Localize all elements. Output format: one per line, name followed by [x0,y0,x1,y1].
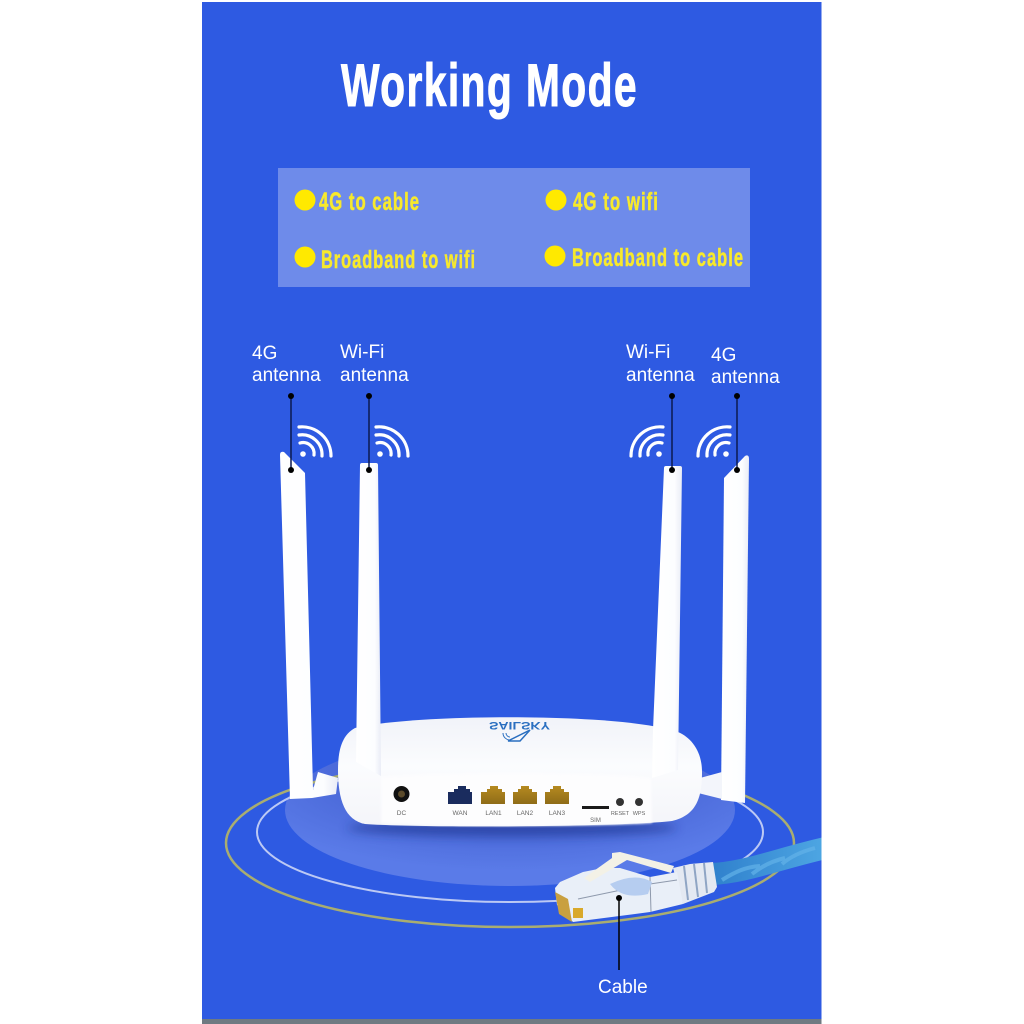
label: 4G antenna left: antenna [252,365,321,386]
label: Cable: Cable [598,977,648,998]
mode: 4G to cable [294,188,420,216]
RESET button [611,798,630,817]
infographic canvas [202,2,822,1024]
leader line: right Wi-Fi [669,393,675,473]
label: Wi-Fi antenna left: antenna [340,365,409,386]
SIM slot: SIM [590,818,601,824]
leader line: cable [616,895,622,970]
plug highlight [610,877,652,896]
WPS button: WPS [633,811,646,817]
mode: Broadband to wifi [294,246,476,274]
LAN1 port [481,786,505,817]
clip [584,852,674,882]
gold contacts [555,892,572,922]
antenna: far right 4G [698,455,749,803]
label: Wi-Fi antenna right: antenna [626,365,695,386]
plug contours [578,877,677,912]
antenna: inner left Wi-Fi [356,463,381,776]
brand logo [489,719,551,741]
mode: Broadband to cable: Broadband to cable [572,244,744,272]
DC port: DC [397,810,406,817]
boot [673,862,717,904]
wifi icon: inner right [631,427,663,457]
WPS button [633,798,646,817]
LAN3 port [545,786,569,817]
router shadow [347,819,677,837]
router body [338,717,702,826]
wifi icon: far left [299,427,331,457]
RESET button: RESET [611,811,630,817]
leader line: left Wi-Fi [366,393,372,473]
SIM slot [582,806,609,824]
footer strip [202,1019,822,1024]
LAN1 port: LAN1 [485,810,502,817]
mode: Broadband to wifi: Broadband to wifi [321,246,476,274]
leader line: right 4G [734,393,740,473]
label: 4G antenna left: 4G [252,343,277,364]
LAN2 port: LAN2 [517,810,534,817]
antenna: inner right Wi-Fi [652,466,682,778]
wifi icon: far right [698,427,730,457]
label: 4G antenna right: antenna [711,367,780,388]
wifi icon: inner left [376,427,408,457]
RJ45 connector [555,852,717,922]
brand logo: SAILSKY [489,719,551,731]
mode: 4G to wifi: 4G to wifi [573,188,659,216]
title: Working Mode [341,52,638,119]
label: 4G antenna right: 4G [711,345,736,366]
base ellipse glow [285,734,735,886]
WAN port: WAN [453,810,468,817]
inner white ring [257,762,763,902]
panel: working modes list [278,168,750,287]
mode: Broadband to cable [544,244,744,272]
plug body [555,868,683,922]
mode: 4G to wifi [546,188,659,216]
LAN2 port [513,786,537,817]
label: Wi-Fi antenna left: Wi-Fi [340,342,384,363]
panel: blue background [202,2,822,1019]
mode: 4G to cable: 4G to cable [319,188,420,216]
back panel recess [381,773,652,826]
outer gold ring [226,759,794,927]
antenna: far left 4G [280,452,338,799]
LAN3 port: LAN3 [549,810,566,817]
label: Wi-Fi antenna right: Wi-Fi [626,342,670,363]
WAN port [448,786,472,817]
leader line: left 4G [288,393,294,473]
DC port [394,786,410,817]
cable wire [710,847,830,880]
